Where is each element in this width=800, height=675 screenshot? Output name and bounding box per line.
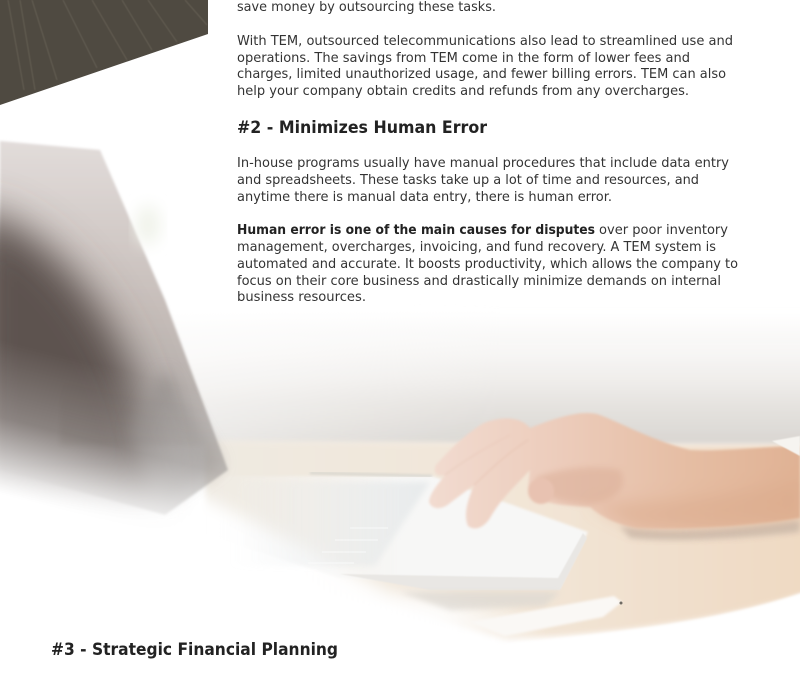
white sheet corner: [500, 590, 800, 675]
finger gaps: [445, 435, 510, 475]
text block: TEM savings paragraph: [237, 34, 733, 99]
photo: dark striped carpet corner: [0, 0, 208, 105]
text block: human error paragraph: business resources.: [237, 290, 366, 305]
heading: #3: #3 - Strategic Financial Planning: [51, 640, 338, 660]
text block: human error paragraph: over poor inventory: [599, 223, 728, 238]
text block: in-house programs: [237, 156, 729, 205]
text block: TEM savings paragraph: With TEM, outsourced telecommunications also lead to streamlined use and: [237, 34, 733, 49]
plant blur: [136, 205, 160, 245]
stylus pen: [470, 596, 622, 636]
white fade over desk, lower left: [190, 490, 560, 660]
shirt cuff: [772, 436, 800, 456]
text block: TEM savings paragraph: help your company obtain credits and refunds from any overcharges.: [237, 84, 689, 99]
text block: in-house programs: In-house programs usually have manual procedures that include data entry: [237, 156, 729, 171]
text block: human error paragraph: management, overcharges, invoicing, and fund recovery. A TEM system is: [237, 240, 716, 255]
keyboard deck: [190, 476, 588, 590]
text block: TEM savings paragraph: operations. The savings from TEM come in the form of lower fees and: [237, 51, 690, 66]
text block: in-house programs: and spreadsheets. These tasks take up a lot of time and resources, and: [237, 173, 699, 188]
photo: laptop on desk with hand: [0, 141, 800, 675]
hand shadow: [620, 520, 800, 540]
text block: human error paragraph: Human error is one of the main causes for disputes: [237, 223, 595, 238]
text block: TEM savings paragraph: charges, limited unauthorized usage, and fewer billing errors. TEM can also: [237, 67, 726, 82]
keys: [308, 528, 388, 563]
keyboard hinge shadow: [310, 473, 432, 476]
desk surface: [205, 440, 800, 640]
laptop screen: [0, 141, 228, 515]
thumb tip: [528, 478, 554, 504]
text block: human error paragraph: automated and accurate. It boosts productivity, which allows the company to: [237, 257, 738, 272]
hand: [429, 413, 800, 529]
deck under-shadow: [400, 592, 560, 610]
text block: human error paragraph: [237, 223, 738, 305]
text block: human error paragraph: focus on their core business and drastically minimize demands on internal: [237, 274, 721, 289]
wall background: [60, 310, 800, 445]
text block: in-house programs: anytime there is manual data entry, there is human error.: [237, 190, 612, 205]
palm shadow: [535, 467, 623, 505]
text block: intro continuation: save money by outsourcing these tasks.: [237, 0, 496, 15]
heading: #2: #2 - Minimizes Human Error: [237, 118, 488, 138]
